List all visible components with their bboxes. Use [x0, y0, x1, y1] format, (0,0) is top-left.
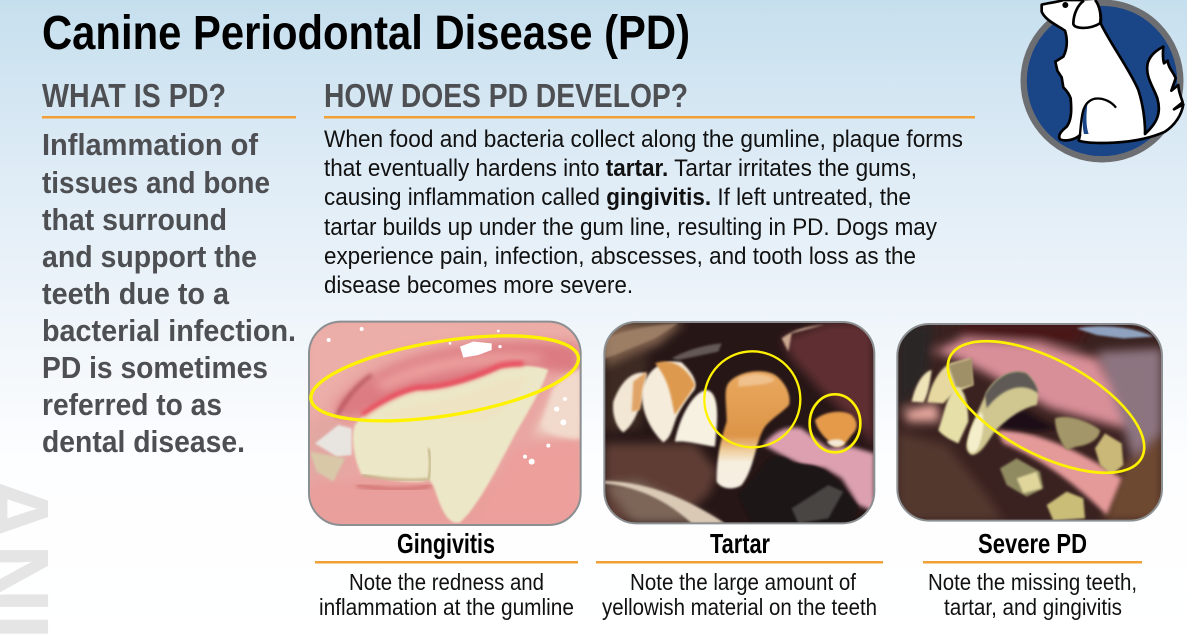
heading: how does PD develop: HOW DOES PD DEVELOP? — [324, 77, 688, 114]
heading: what is PD: WHAT IS PD? — [42, 77, 226, 114]
text block: how PD develops: causing inflammation called gingivitis. If left untreated, the — [324, 184, 911, 211]
text block: how PD develops: disease becomes more severe. — [324, 272, 633, 299]
photo: severe PD — [897, 314, 1164, 521]
caption: gingivitis: Note the redness and — [349, 569, 544, 595]
caption: tartar — [596, 528, 883, 620]
text block: PD definition: that surround — [42, 202, 227, 237]
text block: how PD develops — [324, 126, 963, 299]
title: Canine Periodontal Disease (PD) — [42, 7, 690, 60]
photo: tartar — [604, 322, 874, 523]
icon: dog logo — [1024, 0, 1183, 159]
caption: severe PD — [923, 528, 1142, 620]
caption: tartar: yellowish material on the teeth — [602, 594, 877, 620]
text block: PD definition: and support the — [42, 239, 257, 274]
text block: how PD develops: tartar builds up under the gum line, resulting in PD. Dogs may — [324, 214, 937, 241]
text block: how PD develops: that eventually hardens into tartar. Tartar irritates the gums, — [324, 155, 917, 182]
text block: PD definition — [42, 127, 296, 459]
caption: gingivitis: inflammation at the gumline — [319, 594, 574, 620]
caption: severe PD: Severe PD — [978, 528, 1087, 559]
text block: how PD develops: experience pain, infection, abscesses, and tooth loss as the — [324, 243, 916, 270]
caption: severe PD: tartar, and gingivitis — [944, 594, 1122, 620]
text block: PD definition: bacterial infection. — [42, 313, 296, 348]
text block: PD definition: referred to as — [42, 387, 222, 422]
text block: how PD develops: When food and bacteria collect along the gumline, plaque forms — [324, 126, 963, 153]
text block: PD definition: teeth due to a — [42, 276, 230, 311]
photo: gingivitis — [305, 320, 584, 525]
text block: PD definition: PD is sometimes — [42, 350, 268, 385]
caption: tartar: Note the large amount of — [630, 569, 857, 595]
caption: tartar: Tartar — [710, 528, 770, 559]
caption: severe PD: Note the missing teeth, — [928, 569, 1137, 595]
text block: PD definition: Inflammation of — [42, 127, 259, 162]
text block: PD definition: dental disease. — [42, 424, 245, 459]
text block: PD definition: tissues and bone — [42, 165, 270, 200]
caption: gingivitis: Gingivitis — [397, 528, 495, 559]
caption: gingivitis — [315, 528, 578, 620]
